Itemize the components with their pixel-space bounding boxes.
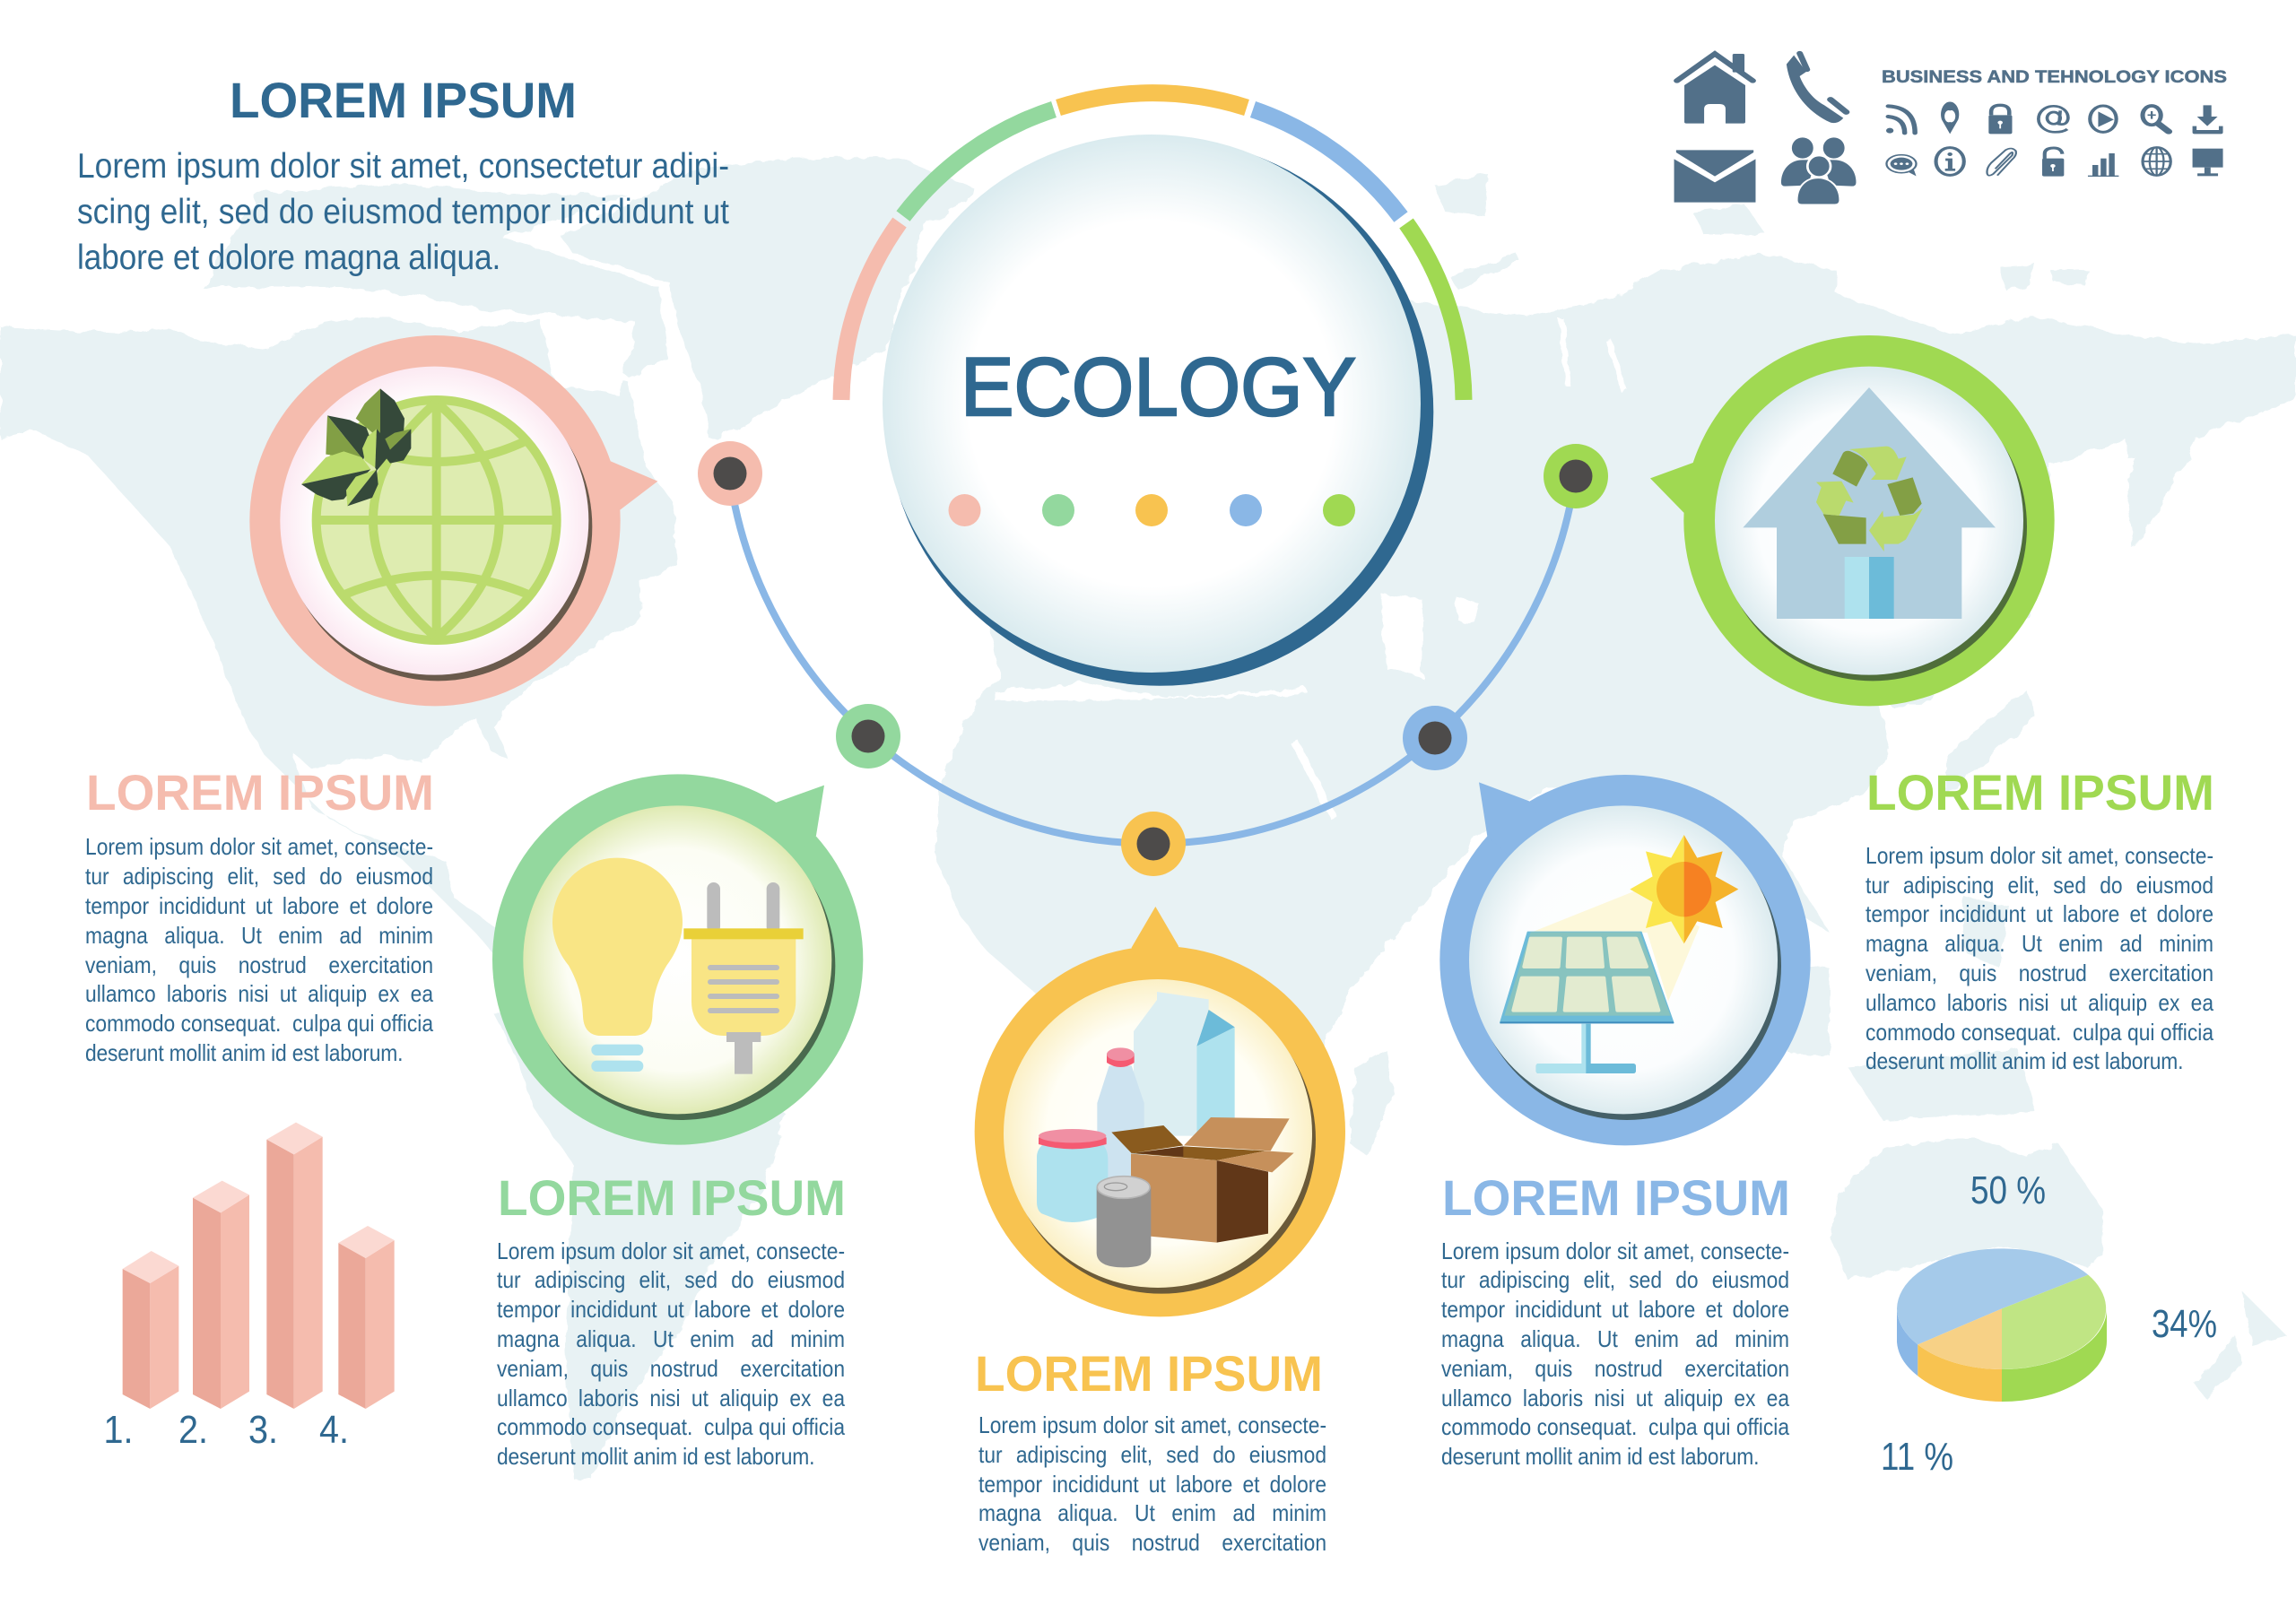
icon: house (1677, 54, 1752, 124)
icon: jar (1037, 1129, 1108, 1222)
icon: monitor (2193, 149, 2223, 176)
text: lime section: ullamco laboris nisi ut aliquip ex ea (1866, 989, 2213, 1016)
pie chart labels: 11 % (1881, 1435, 1953, 1479)
text: pink section: commodo consequat. culpa qui officia (85, 1010, 433, 1037)
heading: icons block: BUSINESS AND TEHNOLOGY ICONS (1882, 68, 2227, 87)
text: green section: tempor incididunt ut labore et dolore (497, 1296, 845, 1323)
text: lime section: tempor incididunt ut labore et dolore (1866, 900, 2213, 927)
text: blue section: deserunt mollit anim id est laborum. (1440, 1443, 1759, 1470)
text: orange section (978, 1411, 1326, 1556)
title: ecology: ECOLOGY (961, 342, 1356, 433)
text: pink section (85, 833, 434, 1066)
text: lime section (1866, 842, 2213, 1074)
icon: download (2193, 105, 2223, 134)
text: green section: Lorem ipsum dolor sit amet, consecte- (497, 1238, 845, 1264)
icon: magnifier (2143, 106, 2169, 132)
text: pink section: ullamco laboris nisi ut aliquip ex ea (85, 980, 433, 1007)
text: lime section: magna aliqua. Ut enim ad minim (1866, 930, 2213, 957)
icon: house (1743, 387, 1996, 619)
text: green section: ullamco laboris nisi ut aliquip ex ea (497, 1385, 845, 1411)
badge: bulb and plug (492, 774, 863, 1145)
icon: leaves (301, 388, 411, 506)
text: green section: commodo consequat. culpa qui officia (497, 1413, 845, 1440)
heading: pink section: LOREM IPSUM (86, 764, 434, 821)
badge: solar panel (1439, 775, 1811, 1145)
text: pink section: tempor incididunt ut labore et dolore (85, 892, 433, 919)
icon: light bulb (552, 858, 683, 1072)
text: lime section: deserunt mollit anim id est laborum. (1866, 1047, 2183, 1074)
text: pink section: veniam, quis nostrud exercitation (85, 951, 433, 978)
bar chart labels: 1. (104, 1408, 133, 1452)
icon: padlock (1988, 105, 2012, 134)
central ring segments (841, 93, 1464, 400)
text: orange section: tur adipiscing elit, sed do eiusmod (978, 1441, 1326, 1468)
icon: signal bars (2088, 153, 2118, 177)
text: green section: veniam, quis nostrud exercitation (497, 1355, 845, 1382)
heading: blue section: LOREM IPSUM (1442, 1169, 1790, 1226)
text: orange section: Lorem ipsum dolor sit amet, consecte- (978, 1411, 1326, 1438)
bar 1 (123, 1251, 178, 1409)
icon: open padlock (2042, 148, 2064, 177)
heading: orange section: LOREM IPSUM (975, 1345, 1323, 1402)
text: pink section: magna aliqua. Ut enim ad minim (85, 922, 433, 949)
text: lime section: Lorem ipsum dolor sit amet, consecte- (1866, 842, 2213, 869)
bar chart labels: 2. (178, 1408, 208, 1452)
text: green section (497, 1238, 845, 1470)
colour dots (949, 494, 1355, 526)
text: green section: deserunt mollit anim id est laborum. (497, 1443, 814, 1470)
intro text: labore et dolore magna aliqua. (77, 239, 500, 277)
icon: phone (1787, 53, 1846, 123)
pie chart labels: 50 % (1970, 1168, 2046, 1212)
text: blue section: ullamco laboris nisi ut aliquip ex ea (1440, 1385, 1789, 1411)
bar chart labels (104, 1408, 349, 1452)
connector curve (731, 484, 1574, 844)
icon: carton (1134, 992, 1235, 1136)
badge: recycling house (1650, 335, 2055, 706)
bar 2 (193, 1181, 249, 1409)
icons: business and technology (1674, 53, 2223, 204)
text: blue section: commodo consequat. culpa qui officia (1440, 1413, 1789, 1440)
text: orange section: veniam, quis nostrud exercitation (978, 1529, 1326, 1556)
icon: chat (1886, 155, 1917, 176)
badge: globe and leaves (249, 335, 657, 706)
icon: at sign (2039, 106, 2068, 132)
central circle (883, 135, 1433, 686)
text: green section: tur adipiscing elit, sed do eiusmod (497, 1266, 845, 1293)
heading: green section: LOREM IPSUM (498, 1169, 846, 1226)
bar chart (123, 1123, 395, 1409)
icon: globe (2143, 147, 2170, 176)
text: orange section: tempor incididunt ut labore et dolore (978, 1471, 1326, 1498)
text: blue section: magna aliqua. Ut enim ad minim (1440, 1325, 1789, 1352)
text: pink section: Lorem ipsum dolor sit amet, consecte- (85, 833, 433, 860)
icon: cardboard box (1111, 1117, 1294, 1243)
pie chart labels: 34% (2152, 1302, 2217, 1346)
bar 4 (338, 1226, 395, 1409)
pie chart (1897, 1248, 2107, 1402)
icon: globe (314, 397, 559, 643)
intro text: scing elit, sed do eiusmod tempor incididunt ut (77, 193, 729, 231)
icon: bottle (1097, 1047, 1144, 1181)
text: blue section (1440, 1238, 1790, 1470)
intro text: Lorem ipsum dolor sit amet, consectetur adipi- (77, 147, 729, 186)
icon: sun with ray (1531, 835, 1738, 1002)
text: blue section: veniam, quis nostrud exercitation (1440, 1355, 1789, 1382)
icon: solar panel (1500, 932, 1674, 1073)
icon: mail (1674, 150, 1755, 203)
badge: recyclable packaging (975, 907, 1345, 1316)
icon: paperclip (1987, 149, 2016, 176)
text: pink section: tur adipiscing elit, sed do eiusmod (85, 863, 433, 890)
icon: info (1936, 148, 1964, 175)
icon: rss (1886, 106, 1915, 134)
icon: location pin (1941, 102, 1959, 134)
text: lime section: commodo consequat. culpa qui officia (1866, 1019, 2213, 1046)
icon: recycling arrows (1816, 447, 1923, 551)
icon: can (1097, 1177, 1151, 1267)
icon: play (2090, 106, 2117, 132)
text: orange section: magna aliqua. Ut enim ad minim (978, 1499, 1326, 1526)
icon: people (1781, 137, 1856, 204)
connector nodes (698, 441, 1608, 876)
text: blue section: Lorem ipsum dolor sit amet, consecte- (1440, 1238, 1789, 1264)
pie chart labels (1881, 1168, 2217, 1479)
bar chart labels: 3. (248, 1408, 278, 1452)
bar chart labels: 4. (319, 1408, 349, 1452)
heading: lime section: LOREM IPSUM (1866, 764, 2214, 821)
icon: plug (683, 882, 804, 1074)
text: pink section: deserunt mollit anim id est laborum. (85, 1039, 403, 1066)
text: lime section: veniam, quis nostrud exercitation (1866, 960, 2213, 986)
text: blue section: tempor incididunt ut labore et dolore (1440, 1296, 1789, 1323)
text: blue section: tur adipiscing elit, sed do eiusmod (1440, 1266, 1789, 1293)
bar 3 (266, 1123, 323, 1409)
heading: main: LOREM IPSUM (230, 72, 577, 128)
text: green section: magna aliqua. Ut enim ad minim (497, 1325, 845, 1352)
intro text (77, 147, 729, 277)
text: lime section: tur adipiscing elit, sed do eiusmod (1866, 872, 2213, 899)
